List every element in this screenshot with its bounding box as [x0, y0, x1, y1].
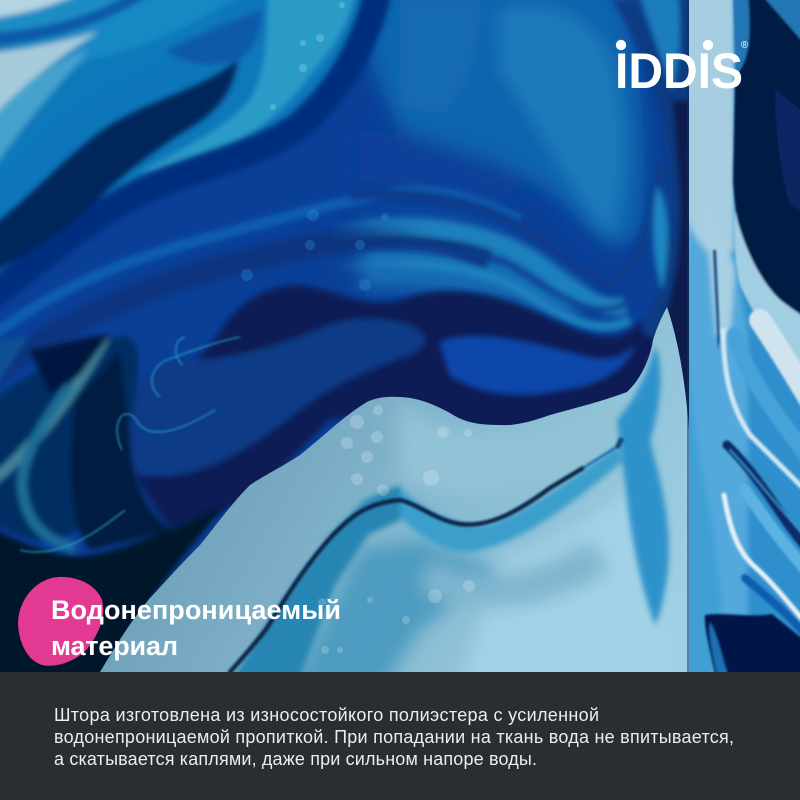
swirl: dark mass above light fabric [118, 285, 660, 530]
fold edge shadow [687, 0, 689, 672]
light fabric: blue fold shade [225, 345, 669, 690]
description text [54, 705, 734, 769]
heading: waterproof material: материал [51, 631, 178, 661]
pink blob [18, 577, 103, 666]
description text: Штора изготовлена из износостойкого полиэстера с усиленной [54, 705, 599, 725]
logo: IDDIS: IDDIS [615, 43, 743, 99]
panel: description [0, 672, 800, 800]
heading: waterproof material [51, 595, 341, 661]
logo: IDDIS: ® [741, 40, 749, 51]
heading: waterproof material: Водонепроницаемый [51, 595, 341, 625]
swirl: fold shadow beside light panel [612, 0, 689, 424]
light fabric: dark thin line [230, 438, 622, 672]
panel: light fabric area [100, 307, 689, 672]
swirl: lower left spiral [0, 335, 225, 690]
water droplets [241, 2, 475, 654]
description text: водонепроницаемой пропиткой. При попадании на ткань вода не впитывается, [54, 727, 734, 747]
description text: а скатывается каплями, даже при сильном напоре воды. [54, 749, 537, 769]
swirl: navy wedge and dark bands [0, 0, 662, 385]
swirl: upper left light blue [0, 0, 362, 275]
swirl: thin teal arcs [20, 337, 240, 552]
swirl: upper centre blue field [350, 0, 644, 320]
panel: right fold of the curtain [680, 0, 800, 690]
light fabric: soft wave shading [300, 408, 636, 672]
